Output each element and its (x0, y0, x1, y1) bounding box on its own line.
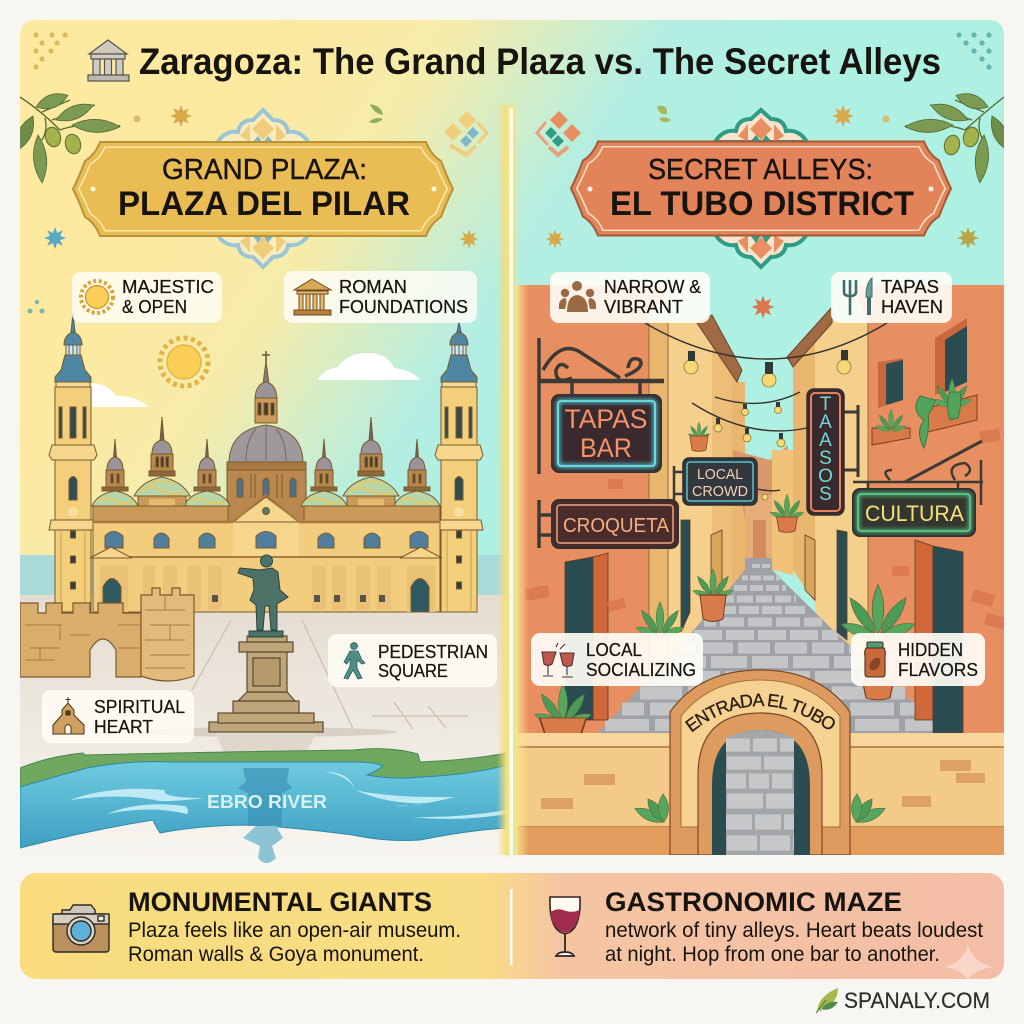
text: gastronomic maze: at night. Hop from one bar to another. (605, 943, 940, 966)
banner: secret alleys heading (571, 142, 951, 236)
neon sign: taasos: A (819, 412, 832, 433)
roof band and facade (90, 495, 442, 612)
icon: spice jar (865, 642, 885, 677)
label: roman foundations: FOUNDATIONS (339, 296, 468, 317)
neon sign: tapas bar: BAR (580, 433, 632, 463)
icon: small sun (81, 281, 113, 313)
clouds (92, 353, 420, 407)
neon sign: taasos: A (819, 430, 832, 451)
neon sign: local crowd (674, 458, 757, 505)
label: pedestrian square: PEDESTRIAN (378, 641, 488, 662)
text: monumental giants: Roman walls & Goya monument. (128, 943, 424, 966)
medallion: right banner (715, 110, 807, 267)
Ebro river with green bank (20, 749, 507, 848)
text: gastronomic maze (605, 887, 983, 966)
icon: sun (160, 338, 208, 386)
text: monumental giants: MONUMENTAL GIANTS (128, 887, 432, 917)
label: local socializing (531, 633, 703, 686)
right edge glow of plaza (497, 105, 507, 855)
wall bricks (524, 428, 1006, 629)
central dome (227, 351, 306, 522)
icon: temple (88, 40, 129, 81)
label: roman foundations: ROMAN (339, 276, 407, 297)
sea band (20, 555, 507, 597)
pavement lines (192, 620, 468, 733)
label: majestic and open: MAJESTIC (122, 276, 214, 297)
towers (49, 313, 483, 612)
entrance arch (669, 669, 851, 855)
label: roman foundations (284, 271, 477, 323)
icon: crowd (559, 281, 596, 312)
Goya statue and pedestal (194, 554, 396, 752)
text: river label: EBRO RIVER (207, 792, 327, 812)
neon sign: local crowd: LOCAL (697, 466, 743, 483)
label: majestic and open (72, 272, 222, 323)
icon: walker (344, 642, 365, 679)
front wall (517, 733, 1004, 855)
icon: clinking glasses (542, 643, 574, 677)
text: gastronomic maze: GASTRONOMIC MAZE (605, 887, 902, 917)
label: tapas haven: TAPAS (881, 276, 939, 297)
panel: secret alleys scene (515, 285, 1004, 855)
decoration: diamond cluster left (444, 111, 487, 155)
banner: secret alleys heading: SECRET ALLEYS: (648, 154, 873, 186)
building base walls (517, 285, 1004, 733)
decoration: diamond cluster right (537, 111, 581, 155)
centre divider glow (507, 105, 515, 855)
icon: chapel (53, 697, 84, 734)
neon sign: local crowd: CROWD (692, 483, 748, 500)
decoration: left olive branch (20, 93, 121, 184)
doors (565, 520, 963, 733)
brand: spanaly.com: SPANALY.COM (844, 988, 990, 1013)
label: narrow and vibrant: VIBRANT (604, 296, 683, 317)
decoration: stars and sprigs (28, 104, 979, 319)
icon: fork and knife (844, 278, 872, 315)
entrance arch: ENTRADA EL TUBO (684, 694, 835, 732)
decorative dots right (956, 32, 992, 70)
window planters (872, 378, 977, 448)
label: tapas haven: HAVEN (881, 296, 943, 317)
heading: Zaragoza: The Grand Plaza vs. The Secret Alleys (139, 41, 941, 82)
neon sign: croqueta (539, 500, 678, 548)
label: pedestrian square (328, 634, 497, 687)
string lights (645, 323, 887, 500)
alley end buildings (732, 445, 793, 575)
label: hidden flavors (851, 633, 985, 686)
neon sign: cultura (853, 441, 983, 536)
label: spiritual heart: SPIRITUAL (94, 696, 185, 717)
icon: camera (53, 905, 109, 952)
neon sign: croqueta: CROQUETA (563, 515, 670, 537)
label: hidden flavors: HIDDEN (898, 639, 963, 660)
label: spiritual heart (42, 690, 194, 743)
banner: grand plaza heading: PLAZA DEL PILAR (118, 185, 410, 223)
text: monumental giants (128, 887, 461, 966)
label: narrow and vibrant: NARROW & (604, 276, 702, 297)
icon: wine glass (550, 897, 580, 956)
plaza ground (20, 595, 507, 855)
Roman wall (20, 588, 194, 681)
neon sign: taasos: O (818, 466, 833, 487)
medallion: left banner (217, 110, 309, 267)
panel: summary band (20, 873, 1004, 979)
decoration: right olive branch (904, 93, 1004, 184)
sparkle (945, 944, 993, 979)
cobbled alley path (598, 558, 947, 733)
text: monumental giants: Plaza feels like an open-air museum. (128, 919, 461, 942)
title bar (33, 32, 992, 82)
banner: secret alleys heading: EL TUBO DISTRICT (610, 185, 914, 223)
small domes (92, 417, 440, 512)
label: pedestrian square: SQUARE (378, 660, 448, 681)
label: tapas haven (831, 272, 952, 323)
banner: grand plaza heading (73, 142, 453, 236)
roofs (697, 307, 832, 382)
banner: grand plaza heading: GRAND PLAZA: (162, 154, 367, 186)
neon sign: taasos: T (820, 394, 832, 415)
neon sign: taasos (807, 389, 858, 515)
text: gastronomic maze: network of tiny alleys. Heart beats loudest (605, 919, 983, 942)
plants and pots (533, 422, 917, 736)
label: local socializing: LOCAL (586, 639, 642, 660)
label: local socializing: SOCIALIZING (586, 659, 696, 680)
neon sign: taasos: S (819, 484, 832, 505)
neon sign: cultura: CULTURA (865, 501, 964, 526)
decorative dots left (33, 32, 68, 70)
upper windows (878, 318, 967, 408)
neon sign: tapas bar: TAPAS (564, 404, 648, 434)
label: narrow and vibrant (550, 272, 710, 323)
main illustrated panel (20, 20, 1004, 855)
river reflection tail (243, 826, 283, 863)
left glow of alleys (515, 285, 529, 855)
Basilica del Pilar (49, 313, 483, 612)
icon: roman temple (294, 279, 331, 315)
neon sign: taasos: S (819, 448, 832, 469)
label: majestic and open: & OPEN (122, 296, 187, 317)
label: hidden flavors: FLAVORS (898, 659, 978, 680)
label: spiritual heart: HEART (94, 716, 153, 737)
panel: grand plaza scene (20, 313, 507, 855)
neon sign: tapas bar (539, 338, 664, 474)
small wall plants (634, 794, 886, 823)
